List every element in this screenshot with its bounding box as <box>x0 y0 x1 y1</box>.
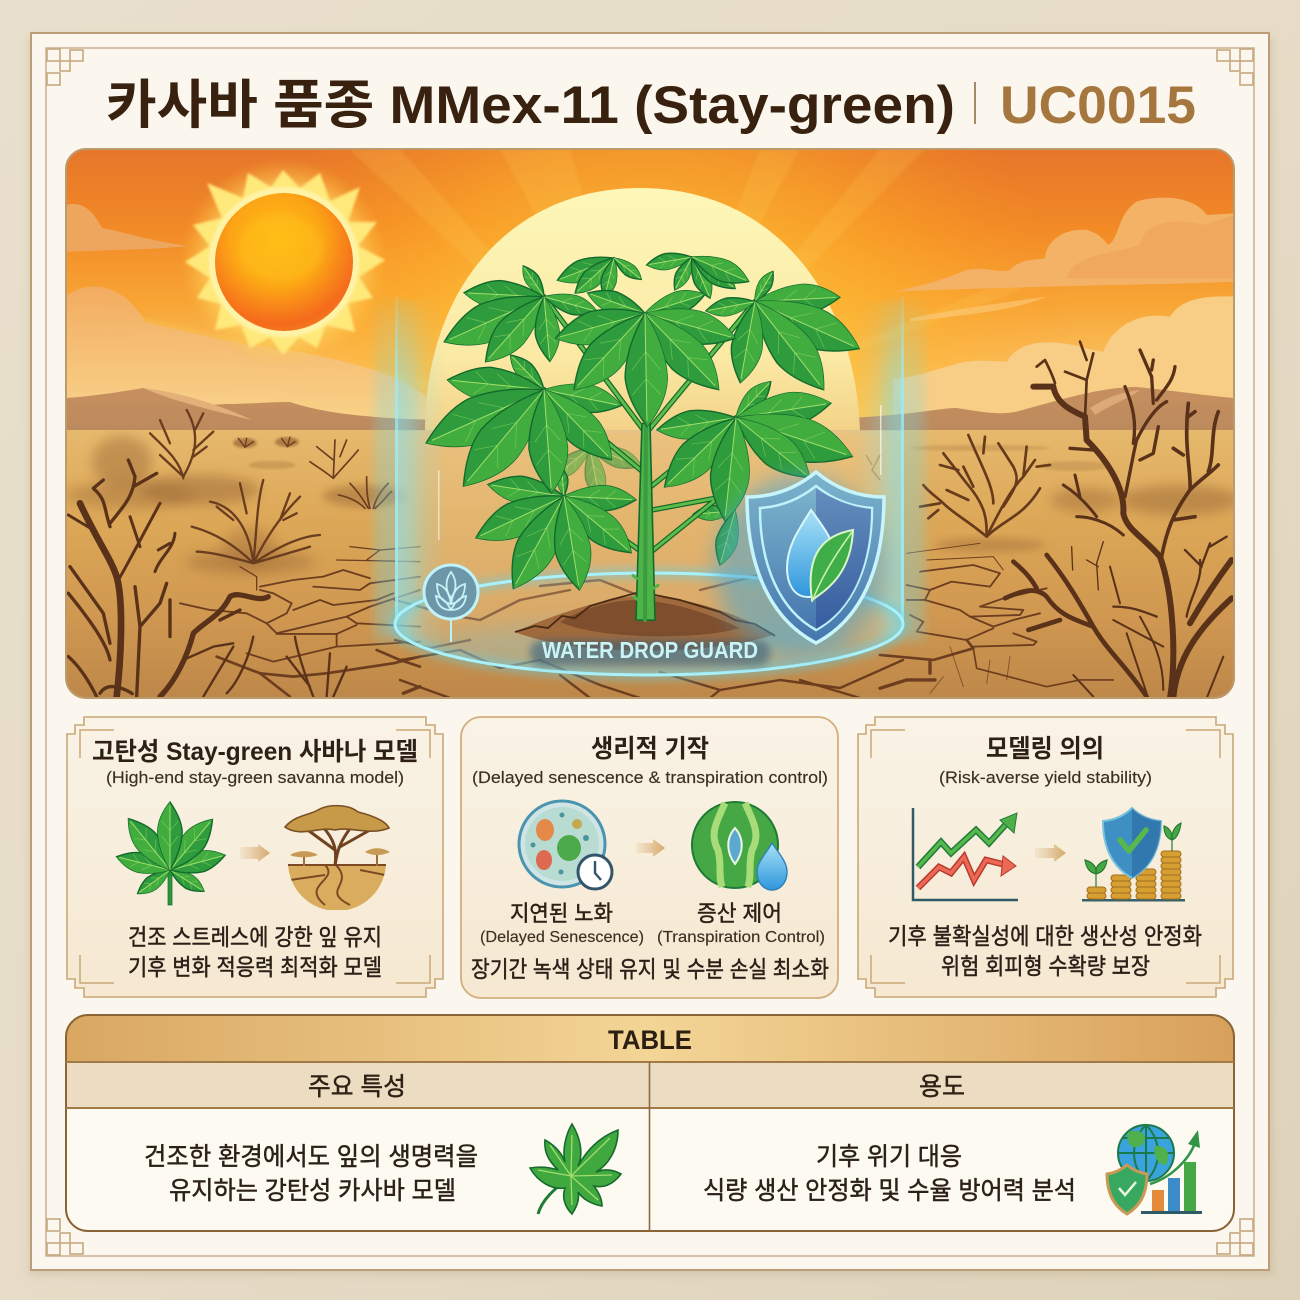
icon: shield and coins <box>1082 808 1185 902</box>
panel body text: 기후 변화 적응력 최적화 모델 <box>128 954 382 980</box>
panel body text <box>128 924 382 980</box>
hills <box>66 387 1234 431</box>
table cell: usage: 식량 생산 안정화 및 수율 방어력 분석 <box>703 1177 1076 1205</box>
title: 카사바 품종 MMex-11 (Stay-green) <box>106 76 955 135</box>
arrow <box>636 839 665 857</box>
table title bar <box>66 1015 1234 1062</box>
soil mound <box>515 592 775 651</box>
table cell: key trait: 건조한 환경에서도 잎의 생명력을 <box>144 1143 478 1171</box>
hero border <box>66 149 1234 698</box>
label: transpiration control: 증산 제어 <box>697 901 782 926</box>
leaf cluster lower left <box>474 470 637 591</box>
arrow <box>1035 844 1066 862</box>
table cell: usage: 기후 위기 대응 <box>816 1143 962 1171</box>
icon: stomata transpiration <box>692 802 787 890</box>
leaf cluster upper right <box>704 270 860 391</box>
panel subtitle: (High-end stay-green savanna model) <box>106 768 404 787</box>
arrow <box>240 844 270 862</box>
label: delayed senescence: (Delayed Senescence) <box>480 929 644 946</box>
cassava plant <box>416 247 868 620</box>
right dead tree and shrub <box>930 342 1232 698</box>
title: UC0015 <box>1000 76 1196 135</box>
table header row <box>66 1062 1234 1108</box>
distant dark patches <box>65 436 1240 574</box>
icon: yield line chart <box>913 808 1018 900</box>
left dead tree and shrubs <box>68 460 347 697</box>
water drop guard shield <box>715 472 885 655</box>
label: transpiration control: (Transpiration Control) <box>657 929 825 946</box>
panel body text: 위험 회피형 수확량 보장 <box>941 953 1150 979</box>
dome base ring <box>395 573 903 675</box>
right clouds <box>893 198 1235 432</box>
panel heading: 생리적 기작 <box>591 735 709 763</box>
table header row: 용도 <box>919 1073 965 1101</box>
mid shrubs <box>150 410 392 563</box>
left clouds <box>66 204 430 431</box>
label: delayed senescence: 지연된 노화 <box>510 901 613 926</box>
icon: cassava leaf in table <box>530 1124 621 1214</box>
icon: globe, shield and growth bars <box>1107 1125 1202 1214</box>
panel body text: 장기간 녹색 상태 유지 및 수분 손실 최소화 <box>471 956 829 982</box>
icon: delayed senescence cell <box>519 801 612 889</box>
back leaves <box>546 247 753 568</box>
panel subtitle: (Delayed senescence & transpiration control) <box>472 768 828 787</box>
cracked ground <box>66 430 1234 700</box>
table cell: key trait <box>144 1143 478 1205</box>
label: transpiration control <box>657 901 825 946</box>
table cell: usage <box>703 1143 1076 1205</box>
sun glow and rays <box>304 150 1018 418</box>
panel body text: 건조 스트레스에 강한 잎 유지 <box>128 924 382 950</box>
table cell: key trait: 유지하는 강탄성 카사바 모델 <box>169 1177 456 1205</box>
pale sun disc behind plant <box>395 188 903 433</box>
label: delayed senescence <box>480 901 644 946</box>
small crop badge icon <box>424 565 478 642</box>
leaf cluster middle left <box>425 354 622 494</box>
icon: cassava leaf <box>114 802 228 905</box>
leaf cluster upper left <box>443 265 596 363</box>
protective dome <box>375 296 924 681</box>
sky <box>66 149 1234 434</box>
hero illustration: drought landscape <box>65 149 1240 700</box>
leaf cluster middle right <box>652 376 860 523</box>
panel body text: 기후 불확실성에 대한 생산성 안정화 <box>888 923 1202 949</box>
sun <box>180 158 388 366</box>
ground cracks <box>180 543 1113 698</box>
table title bar: TABLE <box>608 1025 692 1055</box>
icon: savanna tree <box>285 806 390 910</box>
panel subtitle: (Risk-averse yield stability) <box>939 768 1152 787</box>
table header row: 주요 특성 <box>308 1073 406 1101</box>
panel heading: 고탄성 Stay-green 사바나 모델 <box>92 738 418 766</box>
table <box>66 1015 1234 1231</box>
stems <box>544 297 755 620</box>
water drop guard label: WATER DROP GUARD <box>542 637 758 663</box>
panel: physiological mechanism <box>461 717 838 998</box>
panel: modeling significance <box>858 717 1233 997</box>
leaf cluster top centre <box>551 283 740 427</box>
panel body text <box>888 923 1202 979</box>
panel: stay-green savanna model <box>67 717 443 997</box>
panel heading: 모델링 의의 <box>986 735 1104 763</box>
